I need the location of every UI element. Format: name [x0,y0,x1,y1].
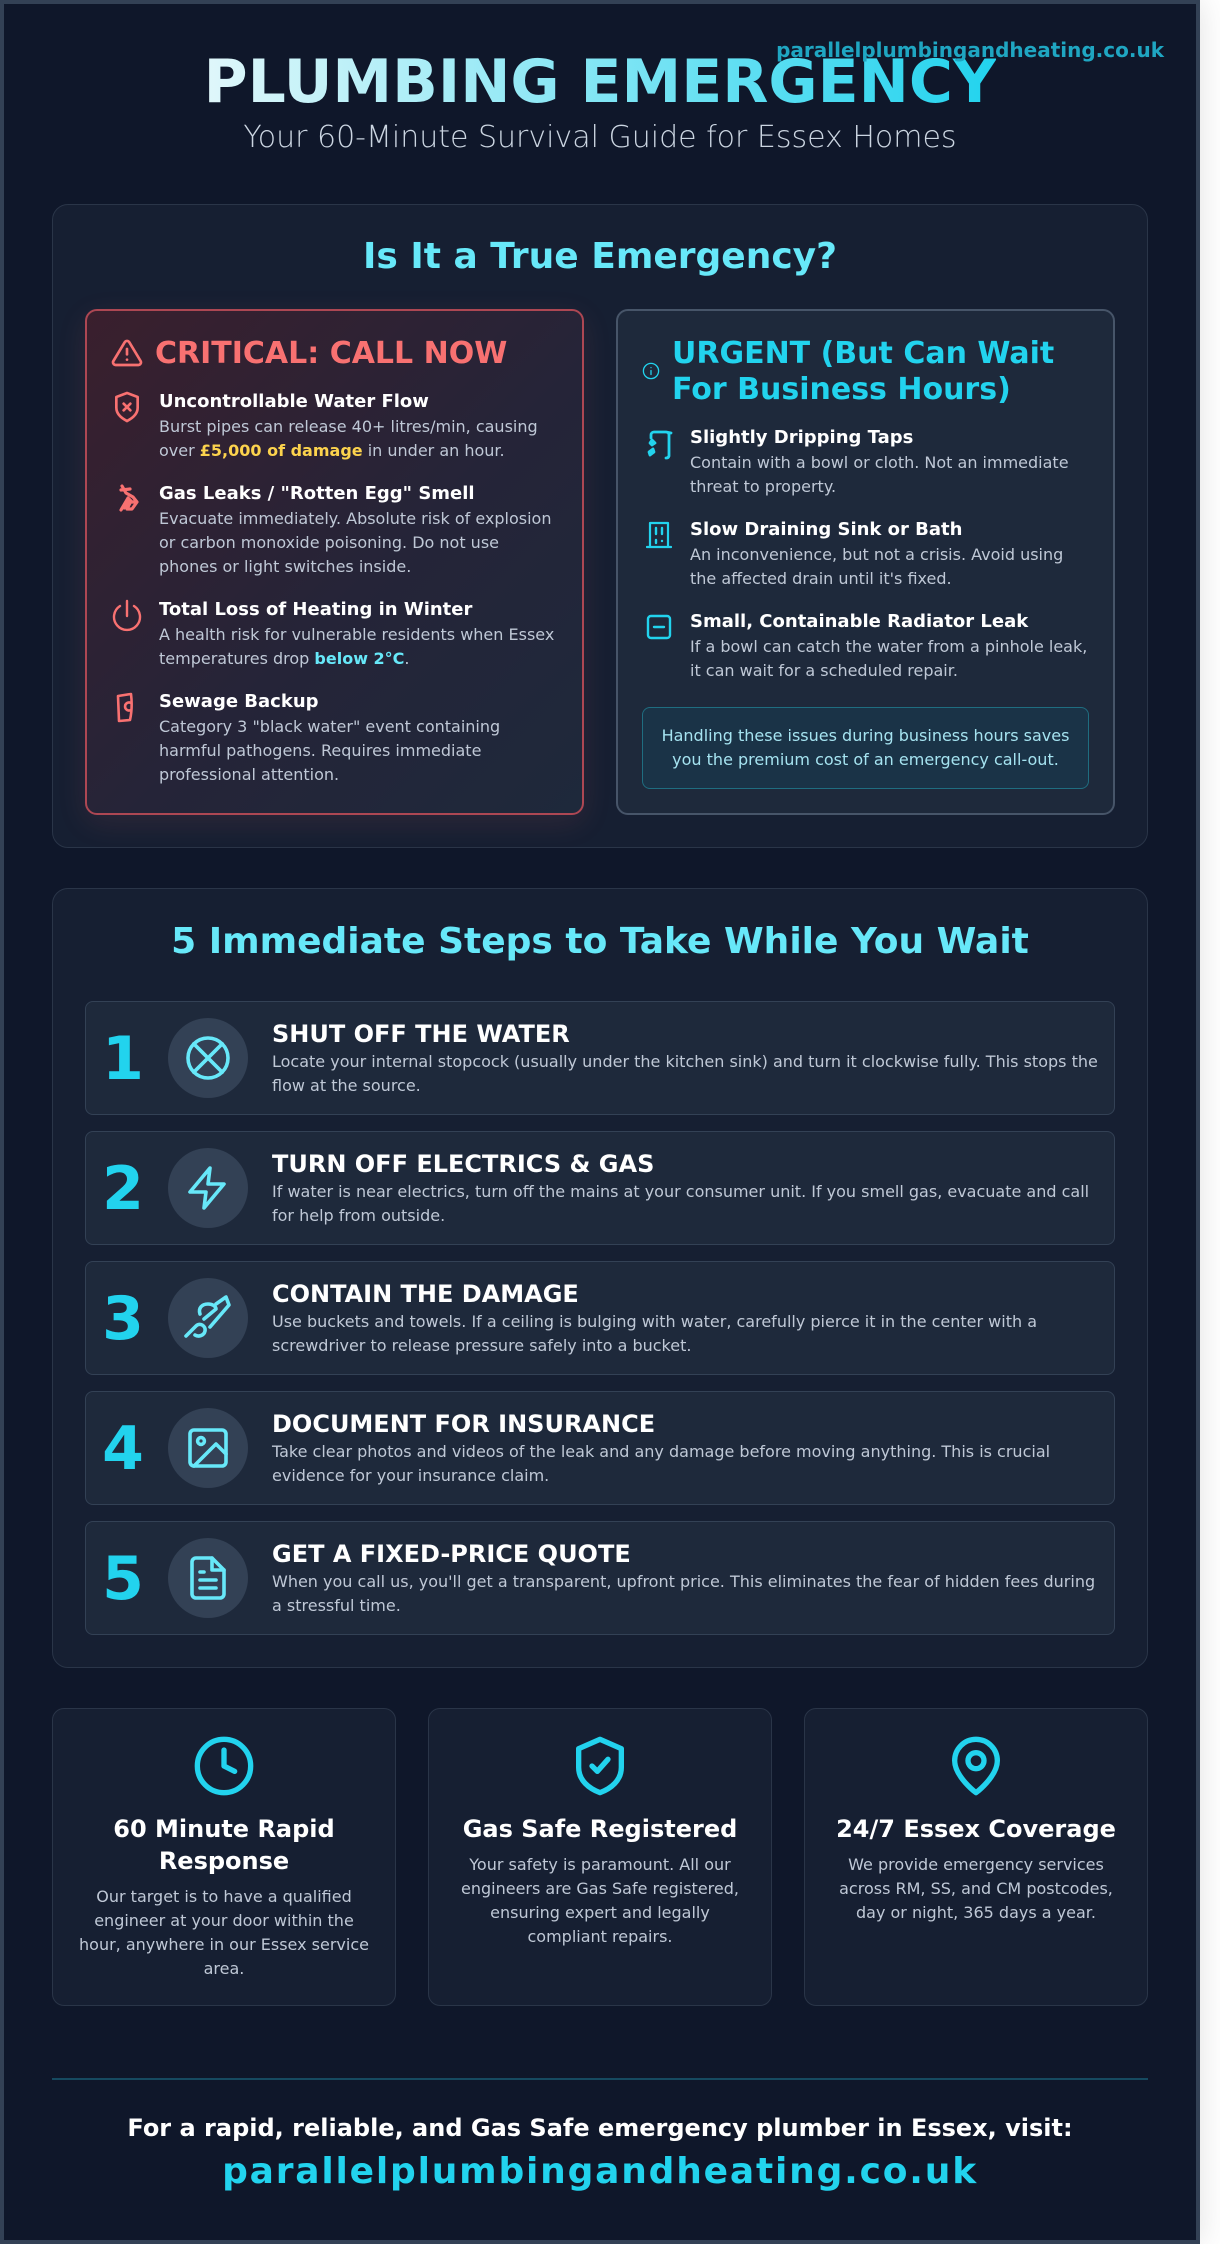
card description: ensuring expert and legally [490,1903,710,1922]
footer [52,2078,1148,2192]
card: rapid response [52,1708,396,2006]
heading: critical: CRITICAL: CALL NOW [155,336,507,371]
icon: drain door [646,522,672,548]
text: heating description [159,625,554,668]
icon: wrench [168,1278,248,1358]
card description: across RM, SS, and CM postcodes, [839,1879,1113,1898]
card description [839,1855,1113,1922]
card title: Gas Safe Registered [463,1815,737,1843]
item: water flow [115,391,538,460]
icon: sewage [116,692,133,722]
icon: map pin [952,1736,1000,1796]
icon: lightning bolt [168,1148,248,1228]
step 4 title: DOCUMENT FOR INSURANCE [272,1410,655,1438]
number 5: 5 [102,1544,144,1614]
step 3 description: screwdriver to release pressure safely into a bucket. [272,1336,691,1355]
icon: info [642,362,660,380]
text: radiator description: it can wait for a scheduled repair. [690,661,958,680]
item: gas leaks [119,483,551,576]
text: sewage description: harmful pathogens. Requires immediate [159,741,481,760]
step 1 description [272,1052,1098,1095]
step 3 title: CONTAIN THE DAMAGE [272,1280,579,1308]
panel: urgent [616,309,1115,815]
text: heating description: A health risk for vulnerable residents when Essex [159,625,554,644]
text: heating title: Total Loss of Heating in Winter [159,599,472,620]
step 3 [85,1261,1115,1375]
card title [113,1815,335,1875]
card description: hour, anywhere in our Essex service [79,1935,369,1954]
title: PLUMBING EMERGENCY [204,47,996,117]
text: taps description [690,453,1069,496]
text: callout copy: Handling these issues during business hours saves [662,726,1069,745]
text: taps title: Slightly Dripping Taps [690,427,913,448]
step 4 [85,1391,1115,1505]
icon: photo [168,1408,248,1488]
subtitle: Your 60-Minute Survival Guide for Essex Homes [243,120,957,155]
panel: immediate steps [52,888,1148,1668]
footer url: parallelplumbingandheating.co.uk [222,2151,978,2192]
text: drain description: the affected drain until it's fixed. [690,569,952,588]
number 2: 2 [102,1154,144,1224]
card description: engineers are Gas Safe registered, [461,1879,739,1898]
text: taps description: Contain with a bowl or cloth. Not an immediate [690,453,1069,472]
step 2 title: TURN OFF ELECTRICS & GAS [272,1150,654,1178]
step 5 description: a stressful time. [272,1596,401,1615]
icon: document [168,1538,248,1618]
text: water flow title: Uncontrollable Water Flow [159,391,429,412]
card description [461,1855,739,1946]
footer text: For a rapid, reliable, and Gas Safe emergency plumber in Essex, visit: [127,2114,1073,2142]
heading: immediate steps: 5 Immediate Steps to Take While You Wait [171,921,1029,962]
text: gas leaks description: Evacuate immediately. Absolute risk of explosion [159,509,551,528]
text: gas leaks description: or carbon monoxide poisoning. Do not use [159,533,499,552]
step 1 title: SHUT OFF THE WATER [272,1020,570,1048]
item: heating [112,599,554,668]
item: sewage [116,691,500,784]
heading: urgent [672,336,1054,407]
icon: power [112,600,142,632]
text: sewage description [159,717,500,784]
number 1: 1 [102,1024,144,1094]
number 4: 4 [102,1414,144,1484]
item: taps [648,427,1069,496]
icon: stop valve [168,1018,248,1098]
text: sewage title: Sewage Backup [159,691,319,712]
step 3 description: Use buckets and towels. If a ceiling is bulging with water, carefully pierce it in the center with a [272,1312,1037,1331]
text: sewage description: professional attention. [159,765,339,784]
footer divider [52,2078,1148,2080]
icon: shield x [115,392,139,422]
number 3: 3 [102,1284,144,1354]
text: water flow description [159,417,538,460]
card title: Response [159,1847,289,1875]
icon: shield check [576,1736,624,1796]
step 2 description [272,1182,1089,1225]
text: water flow description: Burst pipes can release 40+ litres/min, causing [159,417,538,436]
card description: area. [204,1959,244,1978]
step 3 description [272,1312,1037,1355]
text: gas leaks description [159,509,551,576]
step 2 [85,1131,1115,1245]
callout: business hours [642,707,1089,789]
icon: minus square [646,614,672,640]
step 4 description: Take clear photos and videos of the leak and any damage before moving anything. This is crucial [272,1442,1050,1461]
card description: compliant repairs. [528,1927,672,1946]
step 2 description: If water is near electrics, turn off the mains at your consumer unit. If you smell gas, evacuate and call [272,1182,1089,1201]
text: callout copy: you the premium cost of an emergency call-out. [672,750,1059,769]
text: radiator title: Small, Containable Radiator Leak [690,611,1028,632]
card description: day or night, 365 days a year. [856,1903,1096,1922]
item: drain [646,519,1063,588]
icon: tap [648,430,672,460]
text: drain description [690,545,1063,588]
step 1 [85,1001,1115,1115]
item: radiator [646,611,1087,680]
card description: Our target is to have a qualified [96,1887,352,1906]
step 1 description: flow at the source. [272,1076,421,1095]
text: radiator description [690,637,1087,680]
text: radiator description: If a bowl can catch the water from a pinhole leak, [690,637,1087,656]
step 4 description [272,1442,1050,1485]
text: heating description: temperatures drop below 2°C. [159,649,410,668]
step 4 description: evidence for your insurance claim. [272,1466,549,1485]
text: water flow description: over £5,000 of damage in under an hour. [159,441,505,460]
text: drain description: An inconvenience, but not a crisis. Avoid using [690,545,1063,564]
heading: urgent: URGENT (But Can Wait [672,336,1054,371]
card description: We provide emergency services [848,1855,1104,1874]
step 5 description: When you call us, you'll get a transparent, upfront price. This eliminates the fear of hidden fees during [272,1572,1095,1591]
card description: Your safety is paramount. All our [469,1855,731,1874]
card title: 60 Minute Rapid [113,1815,335,1843]
panel: critical [85,309,584,815]
card: gas safe [428,1708,772,2006]
step 5 [85,1521,1115,1635]
card description: engineer at your door within the [94,1911,354,1930]
step 5 title: GET A FIXED-PRICE QUOTE [272,1540,631,1568]
step 1 description: Locate your internal stopcock (usually under the kitchen sink) and turn it clockwise fully. This stops the [272,1052,1098,1071]
text: sewage description: Category 3 "black water" event containing [159,717,500,736]
card description [79,1887,369,1978]
icon: warning triangle [112,340,142,366]
text: drain title: Slow Draining Sink or Bath [690,519,962,540]
icon: clock [194,1736,254,1796]
text: gas leaks title: Gas Leaks / "Rotten Egg" Smell [159,483,475,504]
step 2 description: for help from outside. [272,1206,445,1225]
panel: is it a true emergency [52,204,1148,848]
card: coverage [804,1708,1148,2006]
text: taps description: threat to property. [690,477,836,496]
card title: 24/7 Essex Coverage [836,1815,1116,1843]
text: callout copy [662,726,1069,769]
heading: urgent: For Business Hours) [672,372,1011,407]
text: gas leaks description: phones or light switches inside. [159,557,411,576]
icon: gas flame [119,484,139,512]
heading: is it a true emergency: Is It a True Emergency? [363,236,837,277]
step 5 description [272,1572,1095,1615]
website link top right: parallelplumbingandheating.co.uk [776,38,1164,62]
